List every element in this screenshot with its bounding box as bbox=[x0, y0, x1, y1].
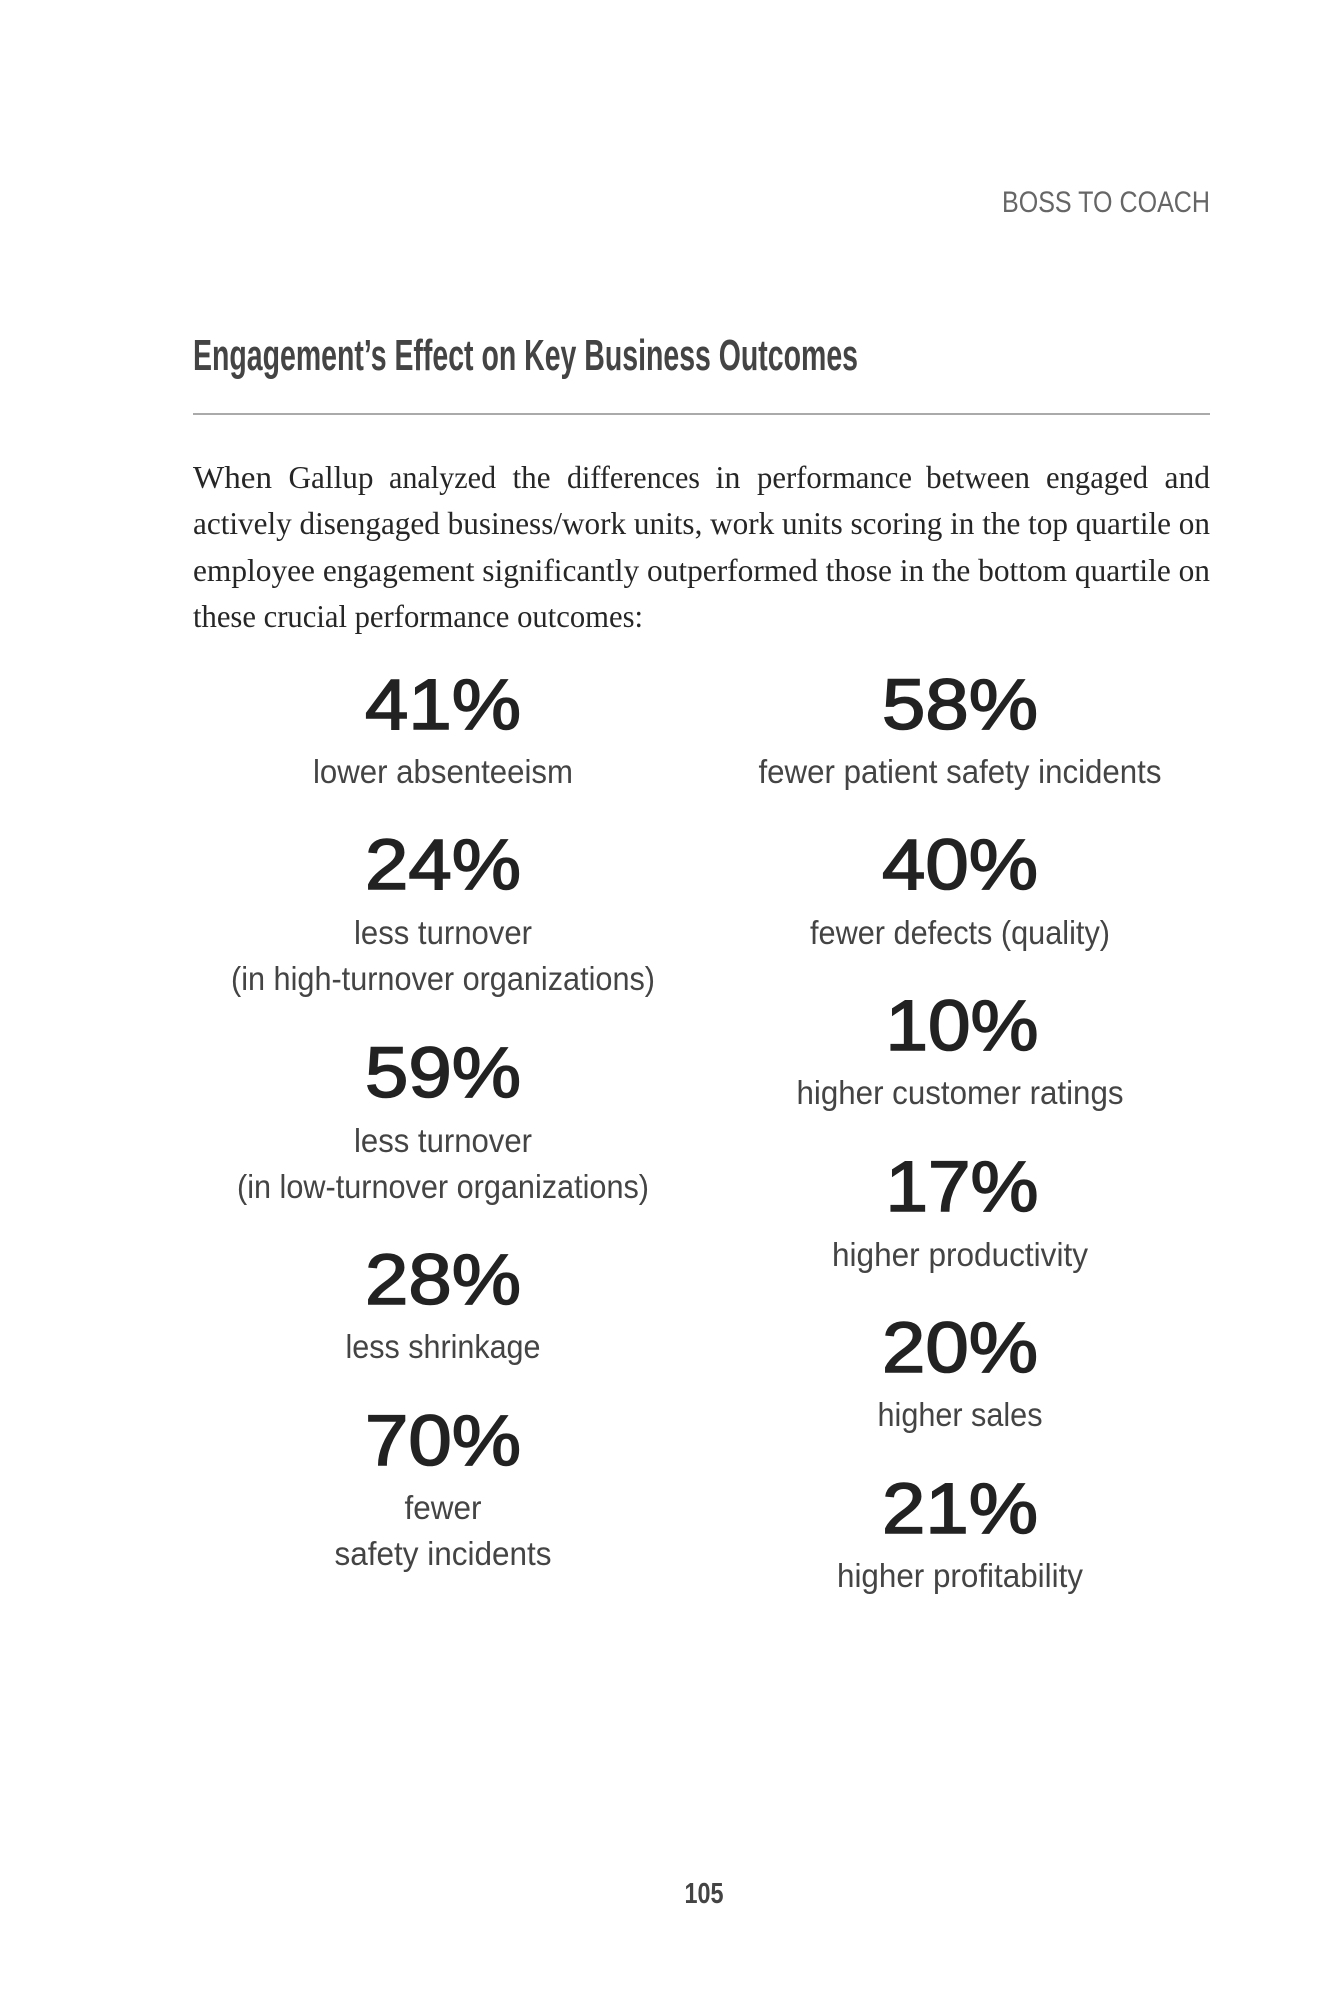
intro paragraph bbox=[193, 459, 1210, 634]
intro paragraph: When bbox=[193, 459, 272, 495]
stat: 10% higher customer ratings: 10% bbox=[886, 987, 1038, 1066]
stat: 28% less shrinkage bbox=[346, 1241, 540, 1365]
stat: 59% less turnover low: 59% bbox=[365, 1034, 521, 1113]
stat: 24% less turnover high: (in high-turnover organizations) bbox=[231, 960, 655, 997]
intro paragraph: employee engagement significantly outperformed those in the bottom quartile on bbox=[193, 552, 1210, 588]
stat: 28% less shrinkage: 28% bbox=[365, 1241, 521, 1320]
stat: 59% less turnover low bbox=[237, 1034, 649, 1205]
stat: 17% higher productivity: 17% bbox=[886, 1148, 1038, 1227]
stat: 41% lower absenteeism: 41% bbox=[365, 666, 521, 745]
stat: 58% fewer patient safety incidents: 58% bbox=[882, 666, 1038, 745]
stat: 70% fewer safety incidents bbox=[334, 1402, 552, 1572]
stat: 28% less shrinkage: less shrinkage bbox=[346, 1328, 540, 1365]
intro paragraph: between bbox=[926, 459, 1030, 495]
stat: 70% fewer safety incidents: safety incidents bbox=[334, 1535, 552, 1572]
intro paragraph: Gallup bbox=[288, 459, 374, 495]
stat: 21% higher profitability bbox=[837, 1470, 1083, 1594]
intro paragraph: engaged bbox=[1046, 459, 1148, 495]
stat: 58% fewer patient safety incidents: fewer patient safety incidents bbox=[758, 753, 1162, 790]
intro paragraph: and bbox=[1164, 459, 1210, 495]
intro paragraph: performance bbox=[757, 459, 912, 495]
intro paragraph: differences bbox=[567, 459, 700, 495]
stat: 17% higher productivity bbox=[832, 1148, 1088, 1273]
stat: 70% fewer safety incidents: fewer bbox=[404, 1489, 482, 1526]
intro paragraph: in bbox=[716, 459, 740, 495]
stat: 40% fewer defects: 40% bbox=[882, 826, 1038, 905]
stat: 24% less turnover high: less turnover bbox=[354, 914, 532, 951]
stat: 24% less turnover high: 24% bbox=[365, 826, 521, 905]
intro paragraph: analyzed bbox=[389, 459, 496, 495]
intro paragraph: actively disengaged business/work units, work units scoring in the top quartile on bbox=[193, 505, 1210, 541]
stat: 10% higher customer ratings: higher customer ratings bbox=[796, 1074, 1124, 1111]
intro paragraph: these crucial performance outcomes: bbox=[193, 598, 643, 634]
stat: 59% less turnover low: (in low-turnover organizations) bbox=[237, 1168, 649, 1205]
page number: 105 bbox=[684, 1878, 724, 1910]
title: Engagement’s Effect on Key Business Outcomes bbox=[193, 331, 858, 380]
stat: 20% higher sales: 20% bbox=[882, 1309, 1038, 1388]
stat: 20% higher sales bbox=[878, 1309, 1042, 1433]
stat: 41% lower absenteeism: lower absenteeism bbox=[313, 753, 573, 790]
stat: 40% fewer defects: fewer defects (quality) bbox=[810, 914, 1110, 951]
stat: 21% higher profitability: 21% bbox=[882, 1470, 1038, 1549]
intro paragraph: the bbox=[512, 459, 550, 495]
stat: 58% fewer patient safety incidents bbox=[758, 666, 1162, 790]
stat: 40% fewer defects bbox=[810, 826, 1110, 951]
stat: 41% lower absenteeism bbox=[313, 666, 573, 790]
stat: 20% higher sales: higher sales bbox=[878, 1396, 1042, 1433]
stat: 21% higher profitability: higher profitability bbox=[837, 1557, 1083, 1594]
stat: 10% higher customer ratings bbox=[796, 987, 1124, 1111]
stat: 24% less turnover high bbox=[231, 826, 655, 997]
running header: BOSS TO COACH bbox=[1002, 186, 1210, 219]
stat: 17% higher productivity: higher productivity bbox=[832, 1236, 1088, 1273]
stat: 70% fewer safety incidents: 70% bbox=[365, 1402, 521, 1481]
stat: 59% less turnover low: less turnover bbox=[354, 1122, 532, 1159]
